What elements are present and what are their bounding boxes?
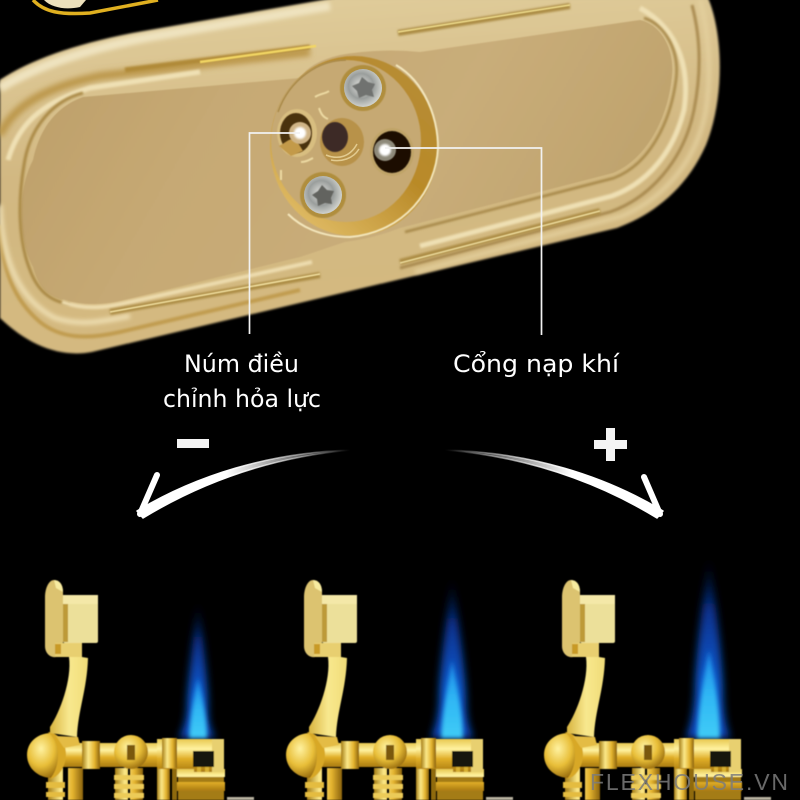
- rim shading: [0, 0, 709, 337]
- lighter mechanism 3: [544, 580, 771, 800]
- gas intake hole: [370, 128, 414, 176]
- plate inner panel: [21, 20, 672, 304]
- leader line: [385, 148, 542, 335]
- centre threaded hole: [320, 118, 364, 166]
- screw top: [340, 65, 386, 111]
- dial engraved marks: [281, 91, 329, 180]
- label: chỉnh hỏa lực: [163, 385, 321, 413]
- flame: small: [179, 600, 215, 738]
- grooves: [125, 47, 310, 70]
- plate outer body: [0, 0, 720, 353]
- adjustment dial recess: [270, 56, 438, 237]
- lighter mechanism 2: [286, 580, 513, 800]
- leader line: [250, 133, 300, 334]
- flame: medium: [431, 575, 473, 738]
- label: Cổng nạp khí: [453, 350, 620, 378]
- plus sign: [594, 428, 627, 461]
- top gold detail: [33, 0, 158, 14]
- screw bottom: [300, 172, 346, 218]
- arrow: increase: [445, 450, 663, 518]
- watermark: FLEXHOUSE.VN: [590, 769, 788, 795]
- callout: gas port: [385, 148, 620, 378]
- minus sign: [177, 439, 209, 448]
- lighter mechanism 1: [27, 580, 254, 800]
- flame knob hole: [277, 109, 317, 157]
- callout: fire knob: [163, 133, 321, 413]
- label: Núm điều: [184, 350, 299, 378]
- photo: gold lighter plate: [0, 0, 720, 353]
- flame: large: [686, 555, 730, 738]
- arrow: decrease: [137, 450, 352, 518]
